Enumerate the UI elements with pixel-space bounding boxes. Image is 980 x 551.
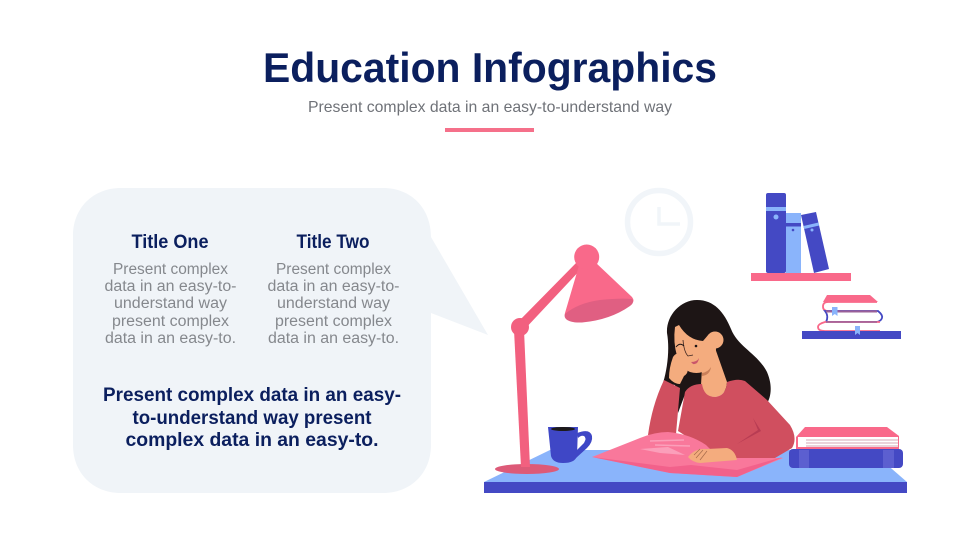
hair [663,300,771,413]
ear [706,332,724,348]
text block: column two: Present complex [276,261,391,278]
text block: column one: data in an easy-to. [105,330,236,347]
icon: coffee mug [548,427,592,463]
face [674,325,716,373]
text block: column one: understand way [114,295,227,312]
panel: speech bubble [73,188,488,493]
icon: lower shelf with books [802,295,901,339]
text block: bold summary [103,384,401,451]
text block: bold summary: complex data in an easy-to. [126,429,378,451]
text block: column two: present complex [275,313,392,330]
illustration: woman reading [592,300,795,477]
title underline [445,128,534,132]
text block: bold summary: to-understand way present [132,407,372,429]
text block: column two [268,261,400,347]
text block: column two: data in an easy-to- [268,278,400,295]
open book [592,432,783,477]
text block: column one: present complex [112,313,229,330]
facial features [683,340,693,356]
text block: column one: data in an easy-to- [104,278,236,295]
icon: wall clock [628,190,690,254]
text block: column one: Present complex [113,261,228,278]
subtitle: Present complex data in an easy-to-understand way [308,99,672,116]
heading: title one: Title One [132,232,208,253]
sweater [678,380,795,461]
text block: bold summary: Present complex data in an easy- [103,384,401,406]
title: Education Infographics [263,44,717,91]
hand [669,354,688,384]
icon: upper shelf with books [751,193,851,281]
text block: column one [104,261,236,347]
heading: title two: Title Two [296,232,370,253]
reading hand [688,448,737,463]
desk [484,450,907,493]
icon: books on desk [789,427,903,468]
text block: column two: understand way [277,295,390,312]
text block: column two: data in an easy-to. [268,330,399,347]
icon: desk lamp [495,244,634,474]
neck [701,345,727,397]
